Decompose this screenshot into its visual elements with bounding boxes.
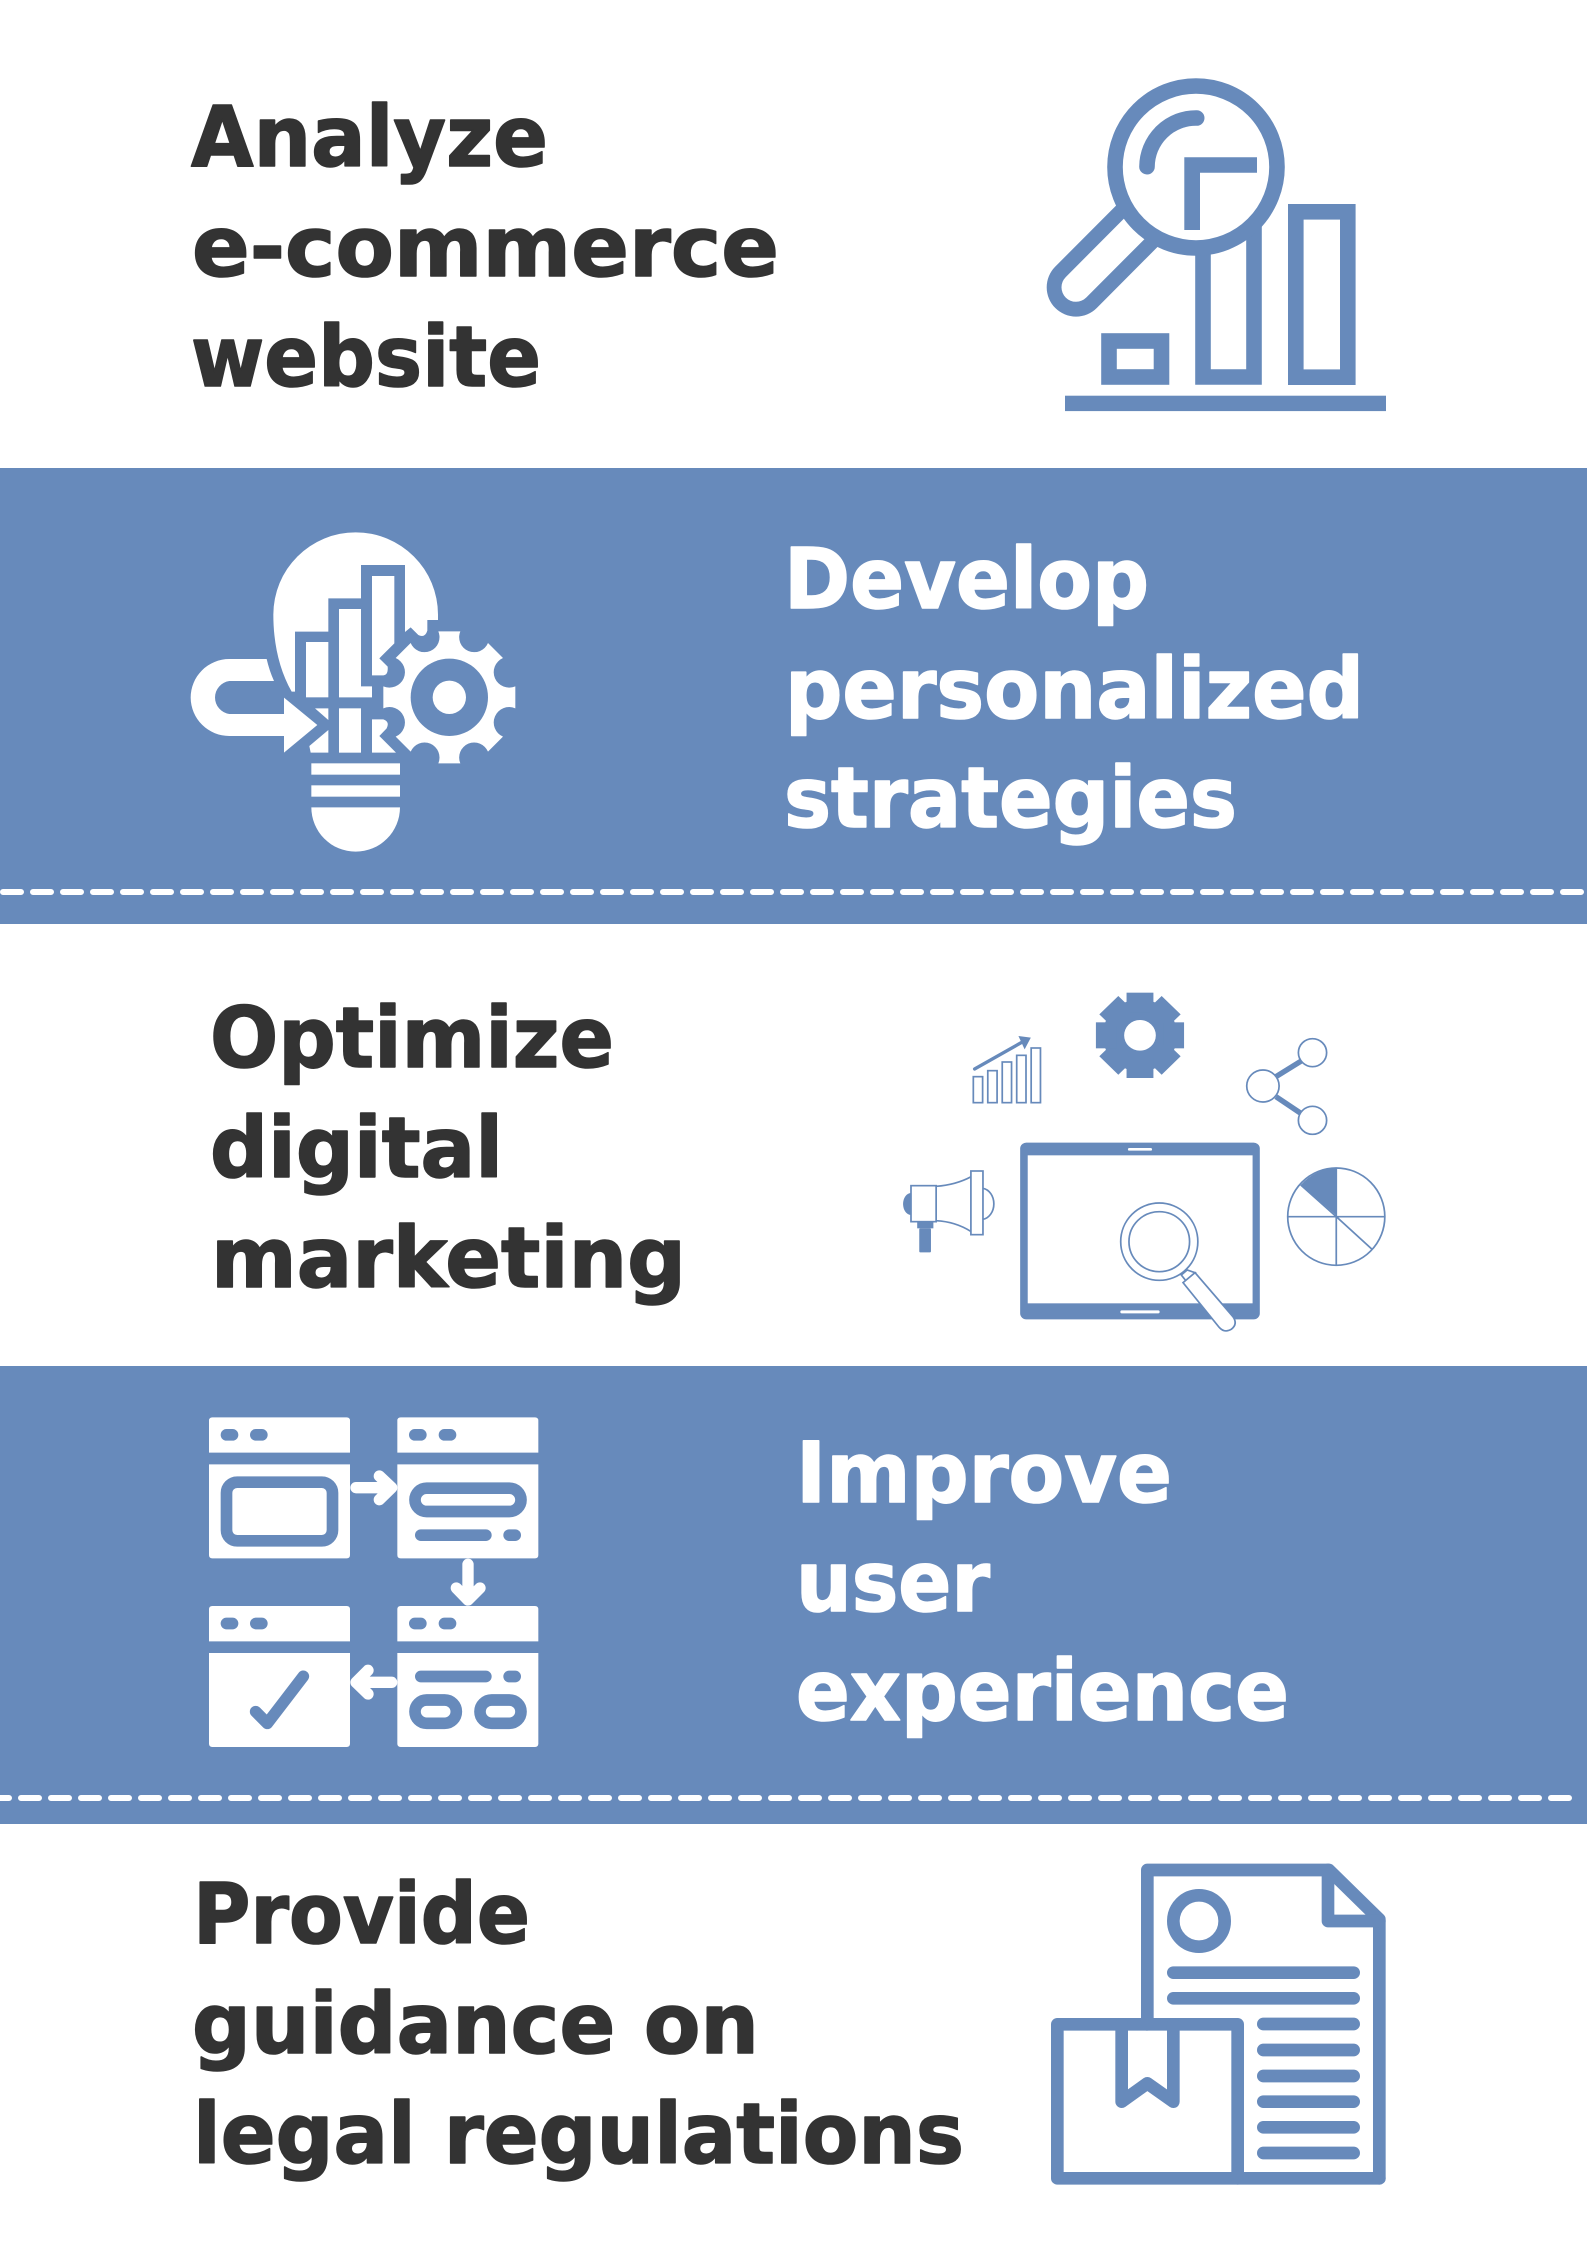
icon: digital marketing cluster [903, 993, 1385, 1331]
heading: develop: strategies [784, 749, 1237, 847]
icon: user flow windows [209, 1417, 538, 1747]
window: bottom left [209, 1606, 350, 1747]
heading: improve: Improve [796, 1424, 1172, 1522]
window: top left [209, 1417, 350, 1558]
heading: develop [784, 530, 1364, 847]
heading: optimize: Optimize [210, 989, 614, 1087]
band background [0, 468, 1587, 924]
growth chart [973, 1036, 1040, 1103]
window: top right [397, 1417, 538, 1558]
pie chart [1288, 1168, 1385, 1265]
heading: develop: Develop [784, 530, 1149, 628]
icon: magnifier over bar chart [1065, 86, 1386, 411]
heading: provide: guidance on [192, 1975, 759, 2073]
panel: provide [192, 1865, 1379, 2183]
heading: optimize: marketing [211, 1209, 686, 1307]
icon: light bulb with chart, arrow and gear [191, 532, 515, 852]
heading: improve [796, 1424, 1289, 1740]
heading: optimize: digital [210, 1099, 503, 1197]
heading: analyze: e-commerce [192, 198, 779, 296]
heading: improve: user [796, 1533, 991, 1631]
heading: provide [192, 1865, 964, 2183]
panel: analyze [191, 86, 1386, 411]
band background [0, 1366, 1587, 1824]
megaphone [903, 1171, 994, 1252]
panel: develop [0, 468, 1587, 924]
gear [1096, 993, 1184, 1078]
window: bottom right [397, 1606, 538, 1747]
heading: develop: personalized [785, 640, 1364, 738]
heading: provide: Provide [193, 1865, 530, 1963]
heading: analyze: website [191, 308, 541, 406]
heading: analyze: Analyze [191, 88, 548, 186]
share symbol [1247, 1039, 1327, 1134]
icon: document and package [1057, 1870, 1379, 2178]
magnifier [1121, 1203, 1235, 1331]
arrows [356, 1476, 480, 1694]
heading: provide: legal regulations [193, 2085, 964, 2183]
panel: improve [0, 1366, 1587, 1824]
heading: analyze [191, 88, 779, 406]
heading: optimize [210, 989, 686, 1307]
panel: optimize [210, 989, 1385, 1331]
heading: improve: experience [796, 1642, 1289, 1740]
tablet [1020, 1143, 1260, 1319]
